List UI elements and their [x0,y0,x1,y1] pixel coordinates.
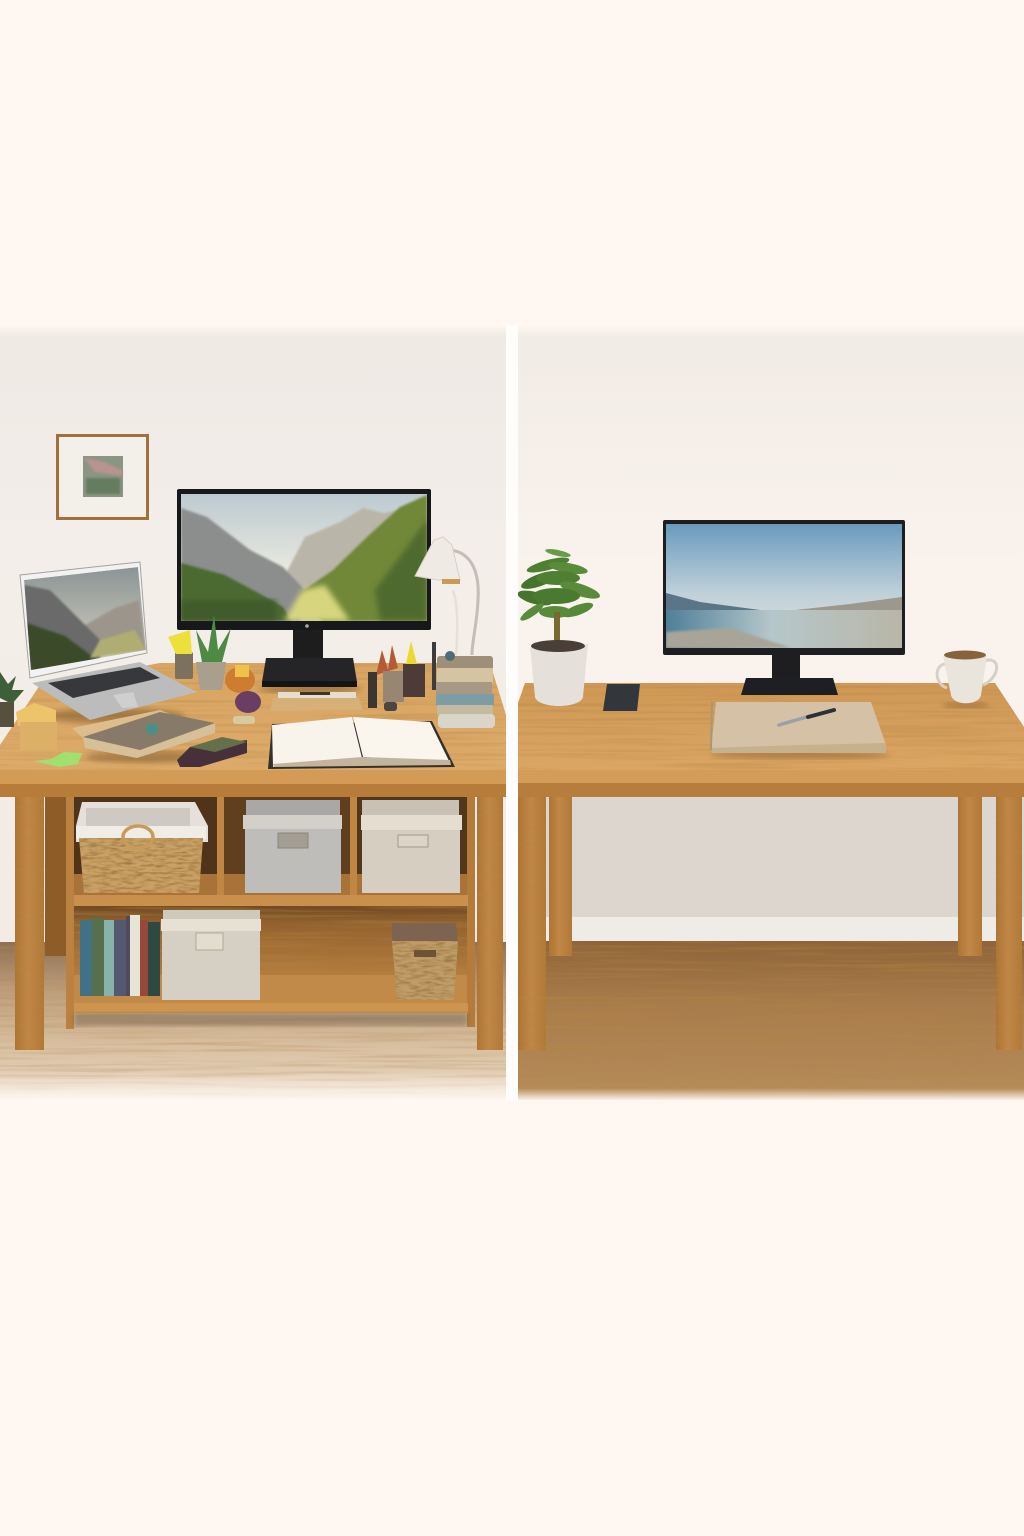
panel: cluttered desk [0,325,506,1101]
front legs right [518,797,1022,1050]
potted green plant [516,547,602,706]
panel fades right [518,325,1024,1101]
closed notebook stack [72,710,215,763]
pen holders [368,641,425,711]
panel: minimal desk [516,325,1024,1101]
potted plant small [196,615,231,690]
beige folder [710,702,890,759]
beige storage box [361,800,462,893]
wall left [0,325,506,945]
pen [779,710,834,725]
row of books [80,915,160,996]
phone [603,684,640,711]
large monitor with mountain wallpaper [177,489,431,693]
apron right [518,783,1024,797]
monitor with seascape [663,520,905,695]
clipboard with pen [270,692,363,711]
floor right [518,941,1024,1100]
coffee mug [937,650,997,708]
desk top right [518,683,1024,772]
small wicker basket [392,923,458,1000]
back leg left [45,797,66,956]
colourful figurine [225,665,261,713]
panel fades left [0,325,506,1101]
wall right [518,325,1024,945]
sticky note cube [16,703,57,750]
framed picture [56,434,149,520]
small metal clip [233,716,255,724]
apron left [0,784,506,797]
floor left [0,942,506,1100]
desk front edge right [518,770,1024,784]
lower storage box [161,910,261,1000]
book stack [432,642,495,728]
desk front edge left [0,770,506,784]
shelf unit [66,797,475,1029]
pouch [177,737,247,767]
wicker basket with liner [76,802,208,893]
small plant at left edge [0,672,24,727]
laptop [20,562,197,724]
skirting board [518,917,1024,942]
pen cup and yellow notes [168,630,193,679]
back legs right [549,797,982,956]
desk lamp [415,537,478,655]
plaster lower wall [518,797,1024,921]
divider gap [506,325,518,1101]
green sticky notes [33,752,82,767]
desk top left [0,663,506,783]
front legs left [15,797,503,1050]
open book [268,717,455,769]
grey storage box [243,800,342,893]
